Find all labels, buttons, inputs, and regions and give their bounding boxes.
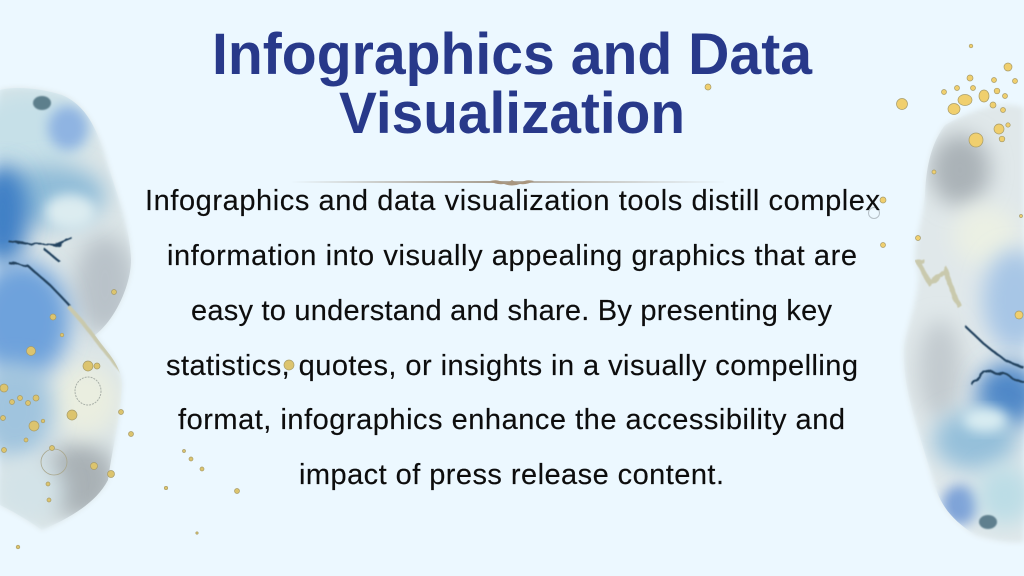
- title: Infographics and Data: [212, 22, 813, 87]
- gold speckles: right: [705, 44, 1023, 319]
- title: Visualization: [339, 81, 685, 146]
- body paragraph: statistics, quotes, or insights in a visually compelling: [166, 350, 858, 382]
- ring splash: [868, 208, 880, 218]
- watercolor blob: right: [904, 105, 1024, 543]
- watercolor blob: left: [0, 88, 135, 530]
- body paragraph: [145, 185, 880, 491]
- body paragraph: information into visually appealing graphics that are: [167, 240, 857, 272]
- body paragraph: Infographics and data visualization tools distill complex: [145, 185, 880, 217]
- gold speckles: left: [0, 290, 294, 549]
- body paragraph: impact of press release content.: [299, 459, 724, 491]
- body paragraph: format, infographics enhance the accessibility and: [178, 404, 845, 436]
- body paragraph: easy to understand and share. By presenting key: [191, 295, 832, 327]
- ornamental divider: [290, 180, 728, 186]
- title: [212, 22, 813, 146]
